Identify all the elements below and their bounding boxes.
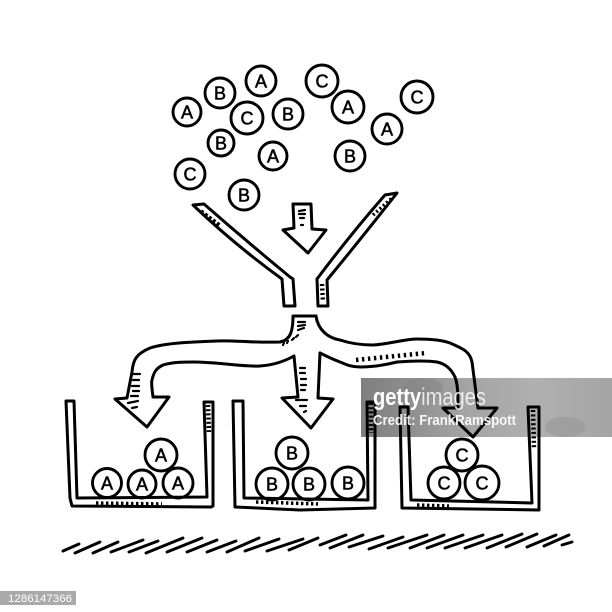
ball A bbox=[246, 66, 276, 96]
ball B bbox=[335, 141, 365, 171]
ball B stacked: B bbox=[286, 444, 298, 464]
ball C stacked: C bbox=[456, 446, 468, 466]
ball C bbox=[175, 159, 205, 189]
ball C: C bbox=[316, 72, 328, 92]
ball A centre: A bbox=[136, 474, 148, 494]
ball B bbox=[229, 180, 259, 210]
ball C bbox=[231, 102, 263, 134]
ball B bbox=[208, 130, 234, 156]
bin A bbox=[66, 401, 213, 507]
ball A bbox=[332, 91, 364, 123]
ball C: C bbox=[240, 108, 254, 128]
ball C left: C bbox=[438, 474, 450, 494]
ball A: A bbox=[381, 120, 393, 140]
ball B: B bbox=[214, 84, 226, 104]
ball A bbox=[259, 142, 287, 170]
floating balls bbox=[173, 65, 433, 210]
funnel right wall bbox=[317, 193, 397, 306]
ball B stacked bbox=[276, 437, 308, 469]
ball C bbox=[306, 65, 338, 97]
ball B centre: B bbox=[303, 474, 315, 494]
ball B centre bbox=[293, 468, 325, 500]
bin C bbox=[400, 407, 539, 510]
ball C: C bbox=[410, 88, 424, 108]
funnel bbox=[193, 193, 397, 306]
ball A: A bbox=[267, 146, 279, 166]
ball A bbox=[173, 98, 201, 126]
ball C right: C bbox=[476, 474, 488, 494]
image id tag bbox=[0, 591, 76, 605]
ball A bbox=[372, 114, 402, 144]
ball B left bbox=[256, 468, 288, 500]
bin C outline bbox=[400, 407, 539, 510]
middle branch arrow bbox=[282, 353, 333, 428]
ball B right: B bbox=[342, 474, 354, 494]
ball A: A bbox=[255, 72, 267, 92]
ball A: A bbox=[342, 98, 354, 118]
ball B: B bbox=[215, 134, 227, 154]
ball B: B bbox=[344, 146, 356, 166]
funnel left wall bbox=[193, 204, 295, 306]
bin A outline bbox=[66, 401, 213, 507]
ball A stacked: A bbox=[155, 446, 167, 466]
ball B right bbox=[332, 467, 364, 499]
ball A right: A bbox=[172, 474, 184, 494]
left branch arrow bbox=[115, 316, 316, 427]
ball A left: A bbox=[101, 474, 113, 494]
watermark bbox=[361, 378, 612, 437]
watermark logo: gettyimages bbox=[373, 384, 486, 411]
ball B bbox=[273, 99, 303, 129]
ball A: A bbox=[181, 102, 193, 122]
ball A centre bbox=[128, 470, 156, 498]
bin B outline bbox=[233, 401, 375, 510]
arrow: split into three bbox=[115, 316, 497, 437]
bin B bbox=[233, 401, 375, 510]
ball A right bbox=[163, 468, 193, 498]
ground hatching bbox=[63, 534, 572, 553]
watermark credit: Credit: FrankRamspott bbox=[373, 413, 516, 429]
right branch arrow bbox=[316, 316, 497, 437]
ball C bbox=[401, 81, 433, 113]
ball A stacked bbox=[145, 439, 177, 471]
ball C: C bbox=[184, 164, 196, 184]
ball B bbox=[205, 78, 235, 108]
watermark band bbox=[361, 378, 612, 437]
arrow: into funnel bbox=[283, 204, 326, 253]
image id tag: 1286147366 bbox=[8, 593, 72, 605]
ball B left: B bbox=[266, 474, 278, 494]
ball B: B bbox=[282, 104, 294, 124]
ball A left bbox=[92, 468, 122, 498]
ball B: B bbox=[238, 186, 250, 206]
